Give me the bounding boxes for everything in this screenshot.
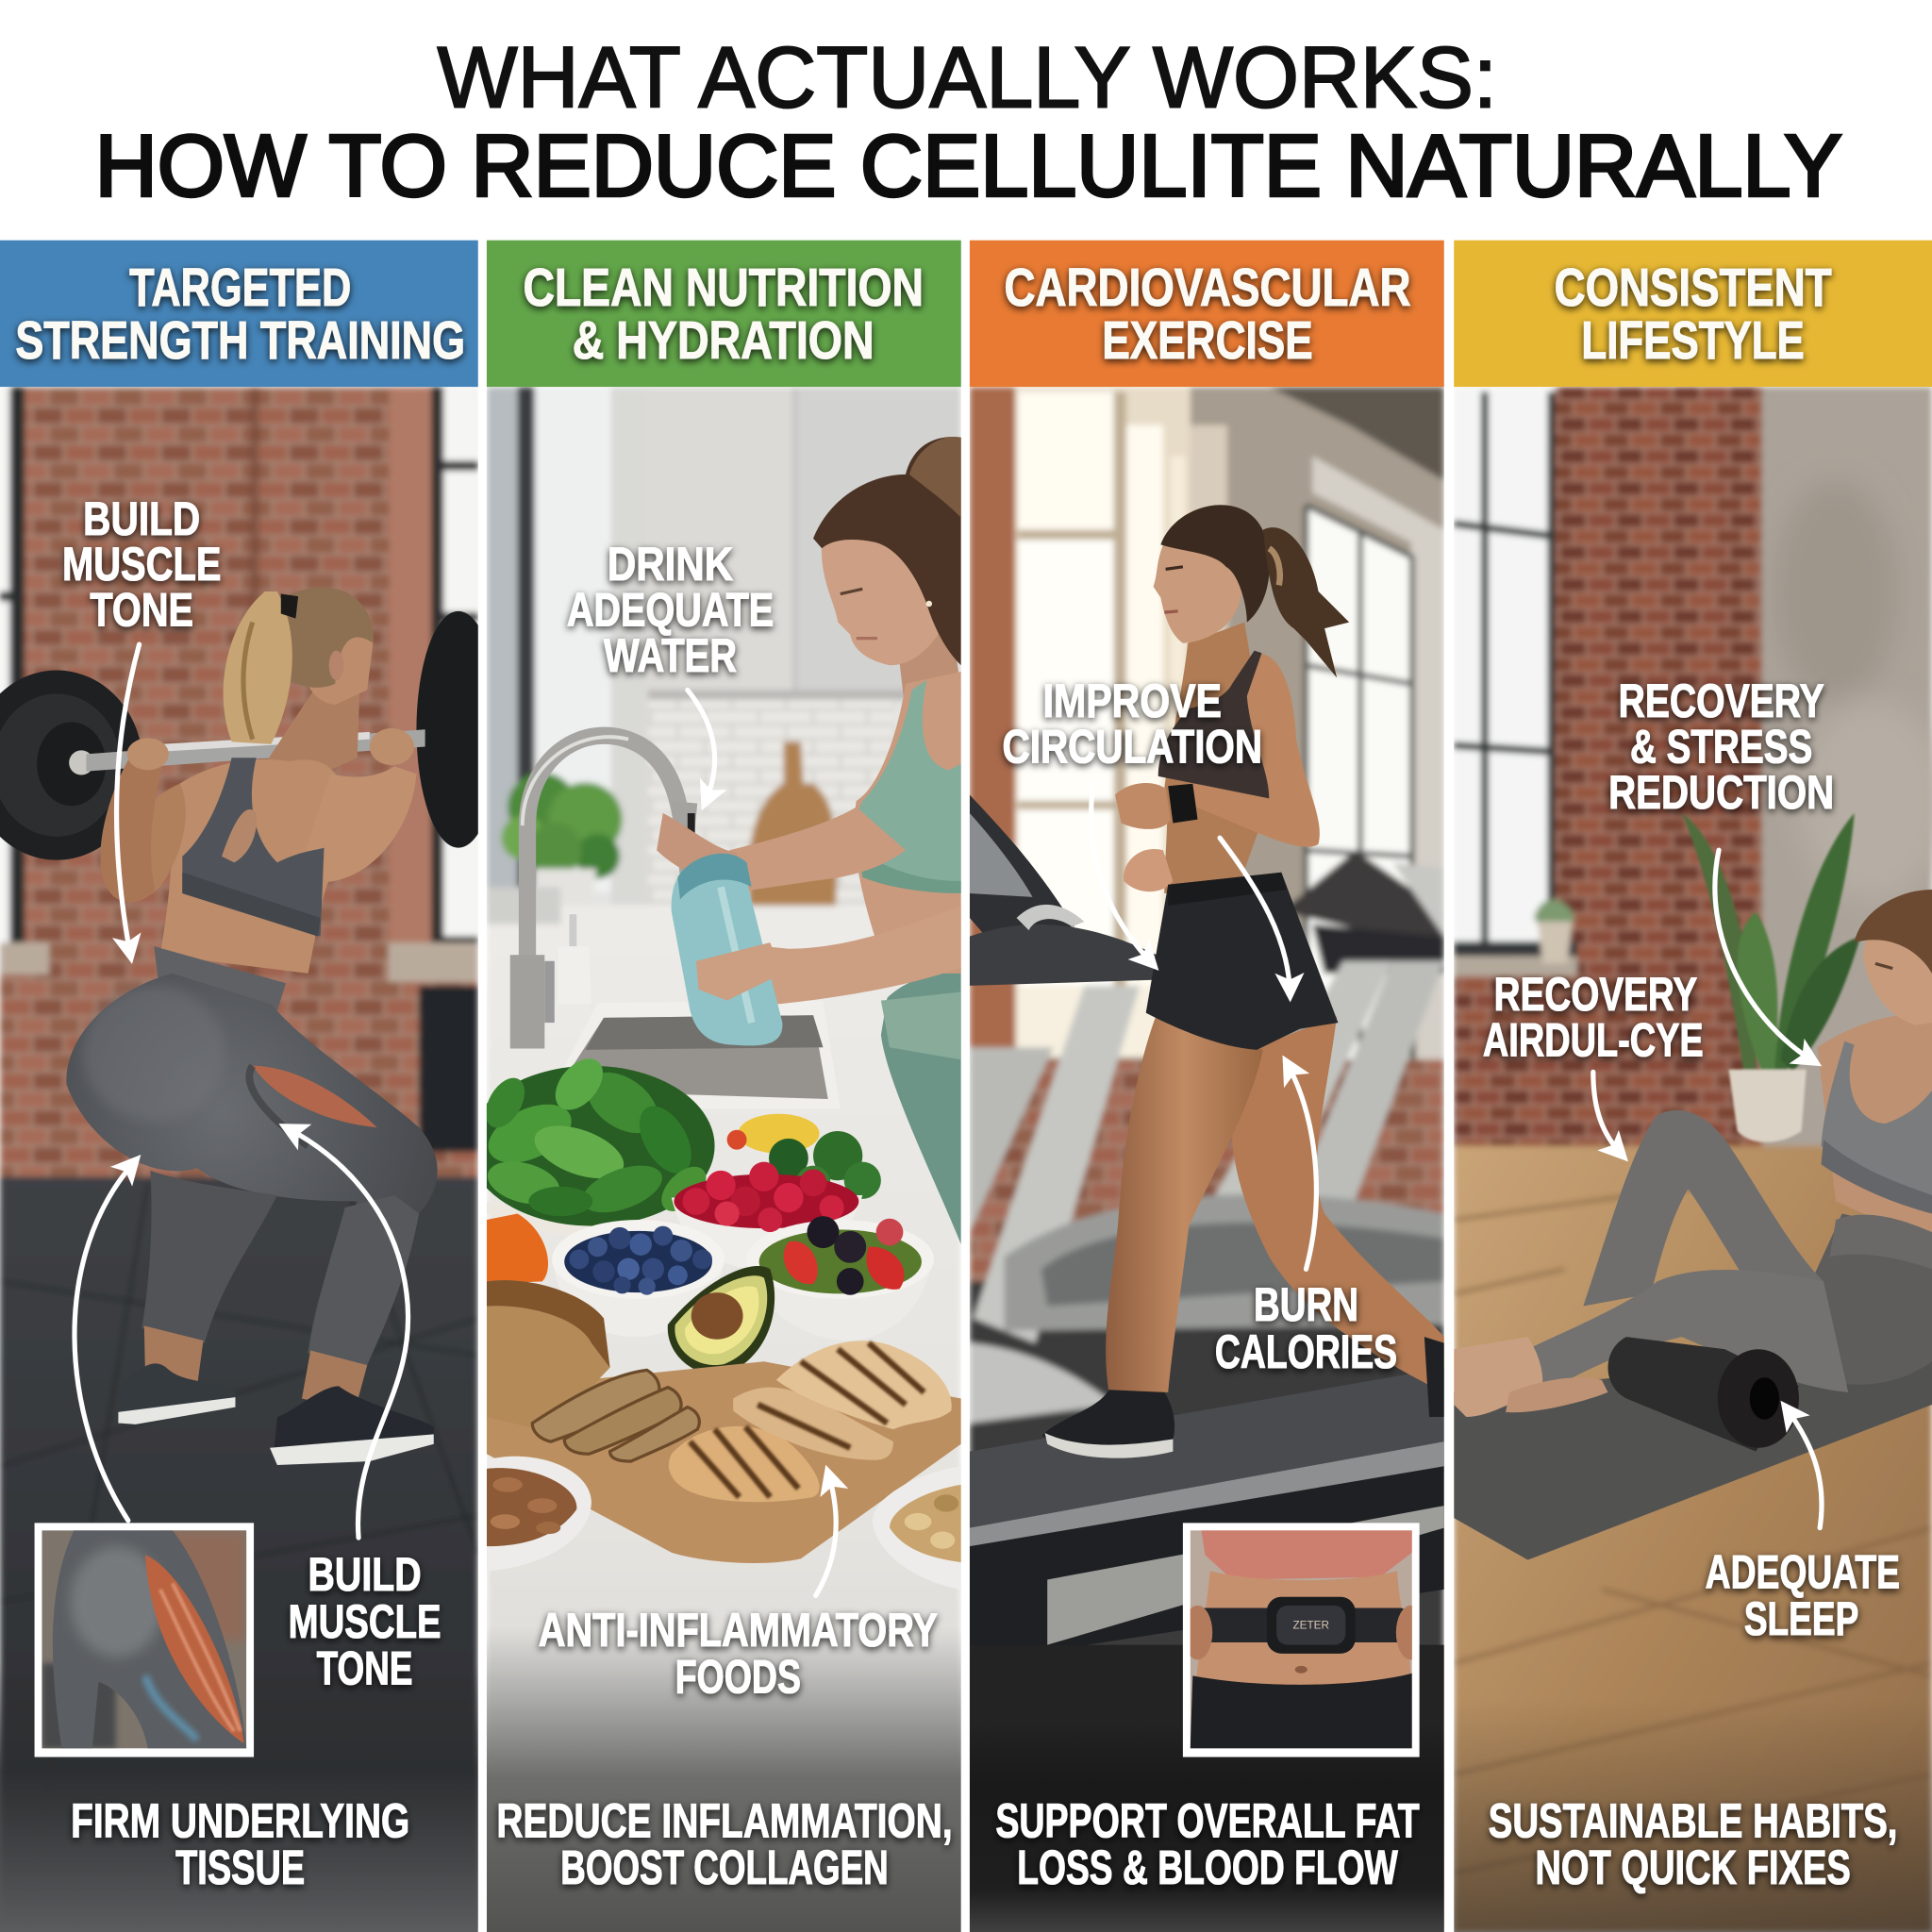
header: clean nutrition and hydration: CLEAN NUTRITION — [523, 258, 924, 317]
photo: woman foam rolling — [1454, 387, 1932, 1932]
bowl: blueberries — [552, 1220, 724, 1299]
title — [95, 30, 1842, 215]
caption: support overall fat loss and blood flow: LOSS & BLOOD FLOW — [1017, 1840, 1398, 1894]
caption: reduce inflammation, boost collagen: BOOST COLLAGEN — [560, 1840, 889, 1894]
label: burn calories: CALORIES — [1215, 1325, 1397, 1378]
label: recovery and stress reduction — [1608, 675, 1834, 819]
header: consistent lifestyle: LIFESTYLE — [1581, 310, 1805, 370]
panel: targeted strength training — [0, 241, 500, 1932]
photo: woman running on treadmill — [970, 387, 1444, 1932]
label: improve circulation: IMPROVE — [1043, 675, 1222, 727]
plant and pot — [1682, 813, 1860, 1142]
header: consistent lifestyle: CONSISTENT — [1555, 258, 1832, 317]
label: build muscle tone top: MUSCLE — [62, 538, 221, 591]
label: recovery and stress reduction: & STRESS — [1630, 720, 1812, 773]
woman upper body — [100, 588, 416, 974]
header: targeted strength training: TARGETED — [129, 258, 351, 317]
sink — [574, 1015, 828, 1099]
inset: heart-rate belt on waist — [1183, 1523, 1425, 1757]
caption: firm underlying tissue: FIRM UNDERLYING — [71, 1793, 409, 1847]
label: burn calories: BURN — [1254, 1278, 1358, 1331]
header: consistent lifestyle — [1454, 241, 1932, 387]
arrows: lifestyle — [1593, 850, 1822, 1528]
bowl: cashews — [873, 1466, 961, 1590]
photo: kitchen and healthy food — [468, 387, 961, 1932]
label: build muscle tone bottom: MUSCLE — [289, 1595, 441, 1648]
header: cardiovascular exercise — [970, 241, 1444, 387]
label: drink adequate water: ADEQUATE — [567, 584, 774, 637]
label: build muscle tone top: TONE — [90, 584, 193, 637]
label: recovery airdulcye: RECOVERY — [1494, 968, 1697, 1021]
panel: clean nutrition and hydration — [468, 241, 961, 1932]
label: build muscle tone top: BUILD — [83, 492, 200, 545]
inset: heart-rate belt on waist: ZETER — [1292, 1620, 1329, 1632]
woman filling bottle — [657, 437, 961, 1244]
label: build muscle tone bottom: BUILD — [308, 1548, 422, 1601]
label: recovery and stress reduction: REDUCTION — [1608, 766, 1834, 819]
label: build muscle tone bottom: TONE — [317, 1641, 413, 1694]
label: improve circulation — [1003, 675, 1262, 773]
header: targeted strength training: STRENGTH TRAINING — [15, 310, 465, 370]
grilled chicken — [669, 1341, 952, 1502]
cutting board — [487, 1361, 961, 1563]
label: recovery airdulcye — [1483, 968, 1704, 1066]
mat — [1454, 1349, 1932, 1560]
header: targeted strength training — [0, 241, 478, 387]
orange pepper — [487, 1214, 548, 1284]
bowl: almonds — [487, 1457, 591, 1571]
faucet — [510, 736, 697, 1049]
treadmill — [970, 794, 1444, 1932]
label: drink adequate water — [567, 538, 774, 682]
header: clean nutrition and hydration — [487, 241, 961, 387]
label: anti-inflammatory foods: ANTI-INFLAMMATORY — [539, 1604, 938, 1657]
photo: woman squatting with barbell — [0, 387, 500, 1932]
panel: consistent lifestyle — [1454, 241, 1932, 1932]
header: clean nutrition and hydration: & HYDRATION — [573, 310, 874, 370]
runner — [1042, 505, 1444, 1458]
label: recovery and stress reduction: RECOVERY — [1619, 675, 1824, 727]
label: anti-inflammatory foods: FOODS — [675, 1651, 801, 1704]
bowl: mixed fruit — [758, 1216, 934, 1298]
label: adequate sleep — [1706, 1546, 1900, 1645]
woman leggings — [66, 946, 438, 1365]
caption: firm underlying tissue: TISSUE — [175, 1840, 305, 1894]
label: improve circulation: CIRCULATION — [1003, 720, 1262, 773]
arrows: strength training — [75, 644, 408, 1538]
woman stretching — [1454, 890, 1932, 1417]
bowl: raspberries — [672, 1162, 862, 1232]
greens and vegetables — [487, 1058, 881, 1226]
title: WHAT ACTUALLY WORKS: — [438, 30, 1497, 126]
caption: support overall fat loss and blood flow: SUPPORT OVERALL FAT — [995, 1793, 1420, 1847]
barbell — [0, 611, 500, 860]
bread loaf and slices — [487, 1280, 699, 1461]
caption: support overall fat loss and blood flow — [995, 1793, 1420, 1894]
label: build muscle tone bottom — [289, 1548, 441, 1694]
label: drink adequate water: DRINK — [608, 538, 733, 591]
header: cardiovascular exercise: CARDIOVASCULAR — [1004, 258, 1411, 317]
sneakers — [118, 1325, 434, 1465]
caption: reduce inflammation, boost collagen — [496, 1793, 953, 1894]
arrows: cardio — [1091, 782, 1316, 1269]
panel: cardiovascular exercise — [970, 241, 1444, 1932]
foam roller — [1607, 1337, 1799, 1452]
header: cardiovascular exercise: EXERCISE — [1102, 310, 1313, 370]
label: anti-inflammatory foods — [539, 1604, 938, 1704]
arrows: nutrition — [688, 690, 836, 1595]
caption: reduce inflammation, boost collagen: REDUCE INFLAMMATION, — [496, 1793, 953, 1847]
label: recovery airdulcye: AIRDUL-CYE — [1483, 1013, 1704, 1066]
inset: muscle close-up — [35, 1523, 254, 1757]
caption: firm underlying tissue — [71, 1793, 409, 1894]
title: HOW TO REDUCE CELLULITE NATURALLY — [95, 117, 1842, 215]
label: build muscle tone top — [62, 492, 221, 637]
label: adequate sleep: SLEEP — [1744, 1592, 1858, 1645]
label: drink adequate water: WATER — [604, 629, 737, 682]
avocado — [668, 1266, 774, 1374]
caption: sustainable habits, not quick fixes — [1489, 1793, 1897, 1894]
label: burn calories — [1215, 1278, 1397, 1378]
